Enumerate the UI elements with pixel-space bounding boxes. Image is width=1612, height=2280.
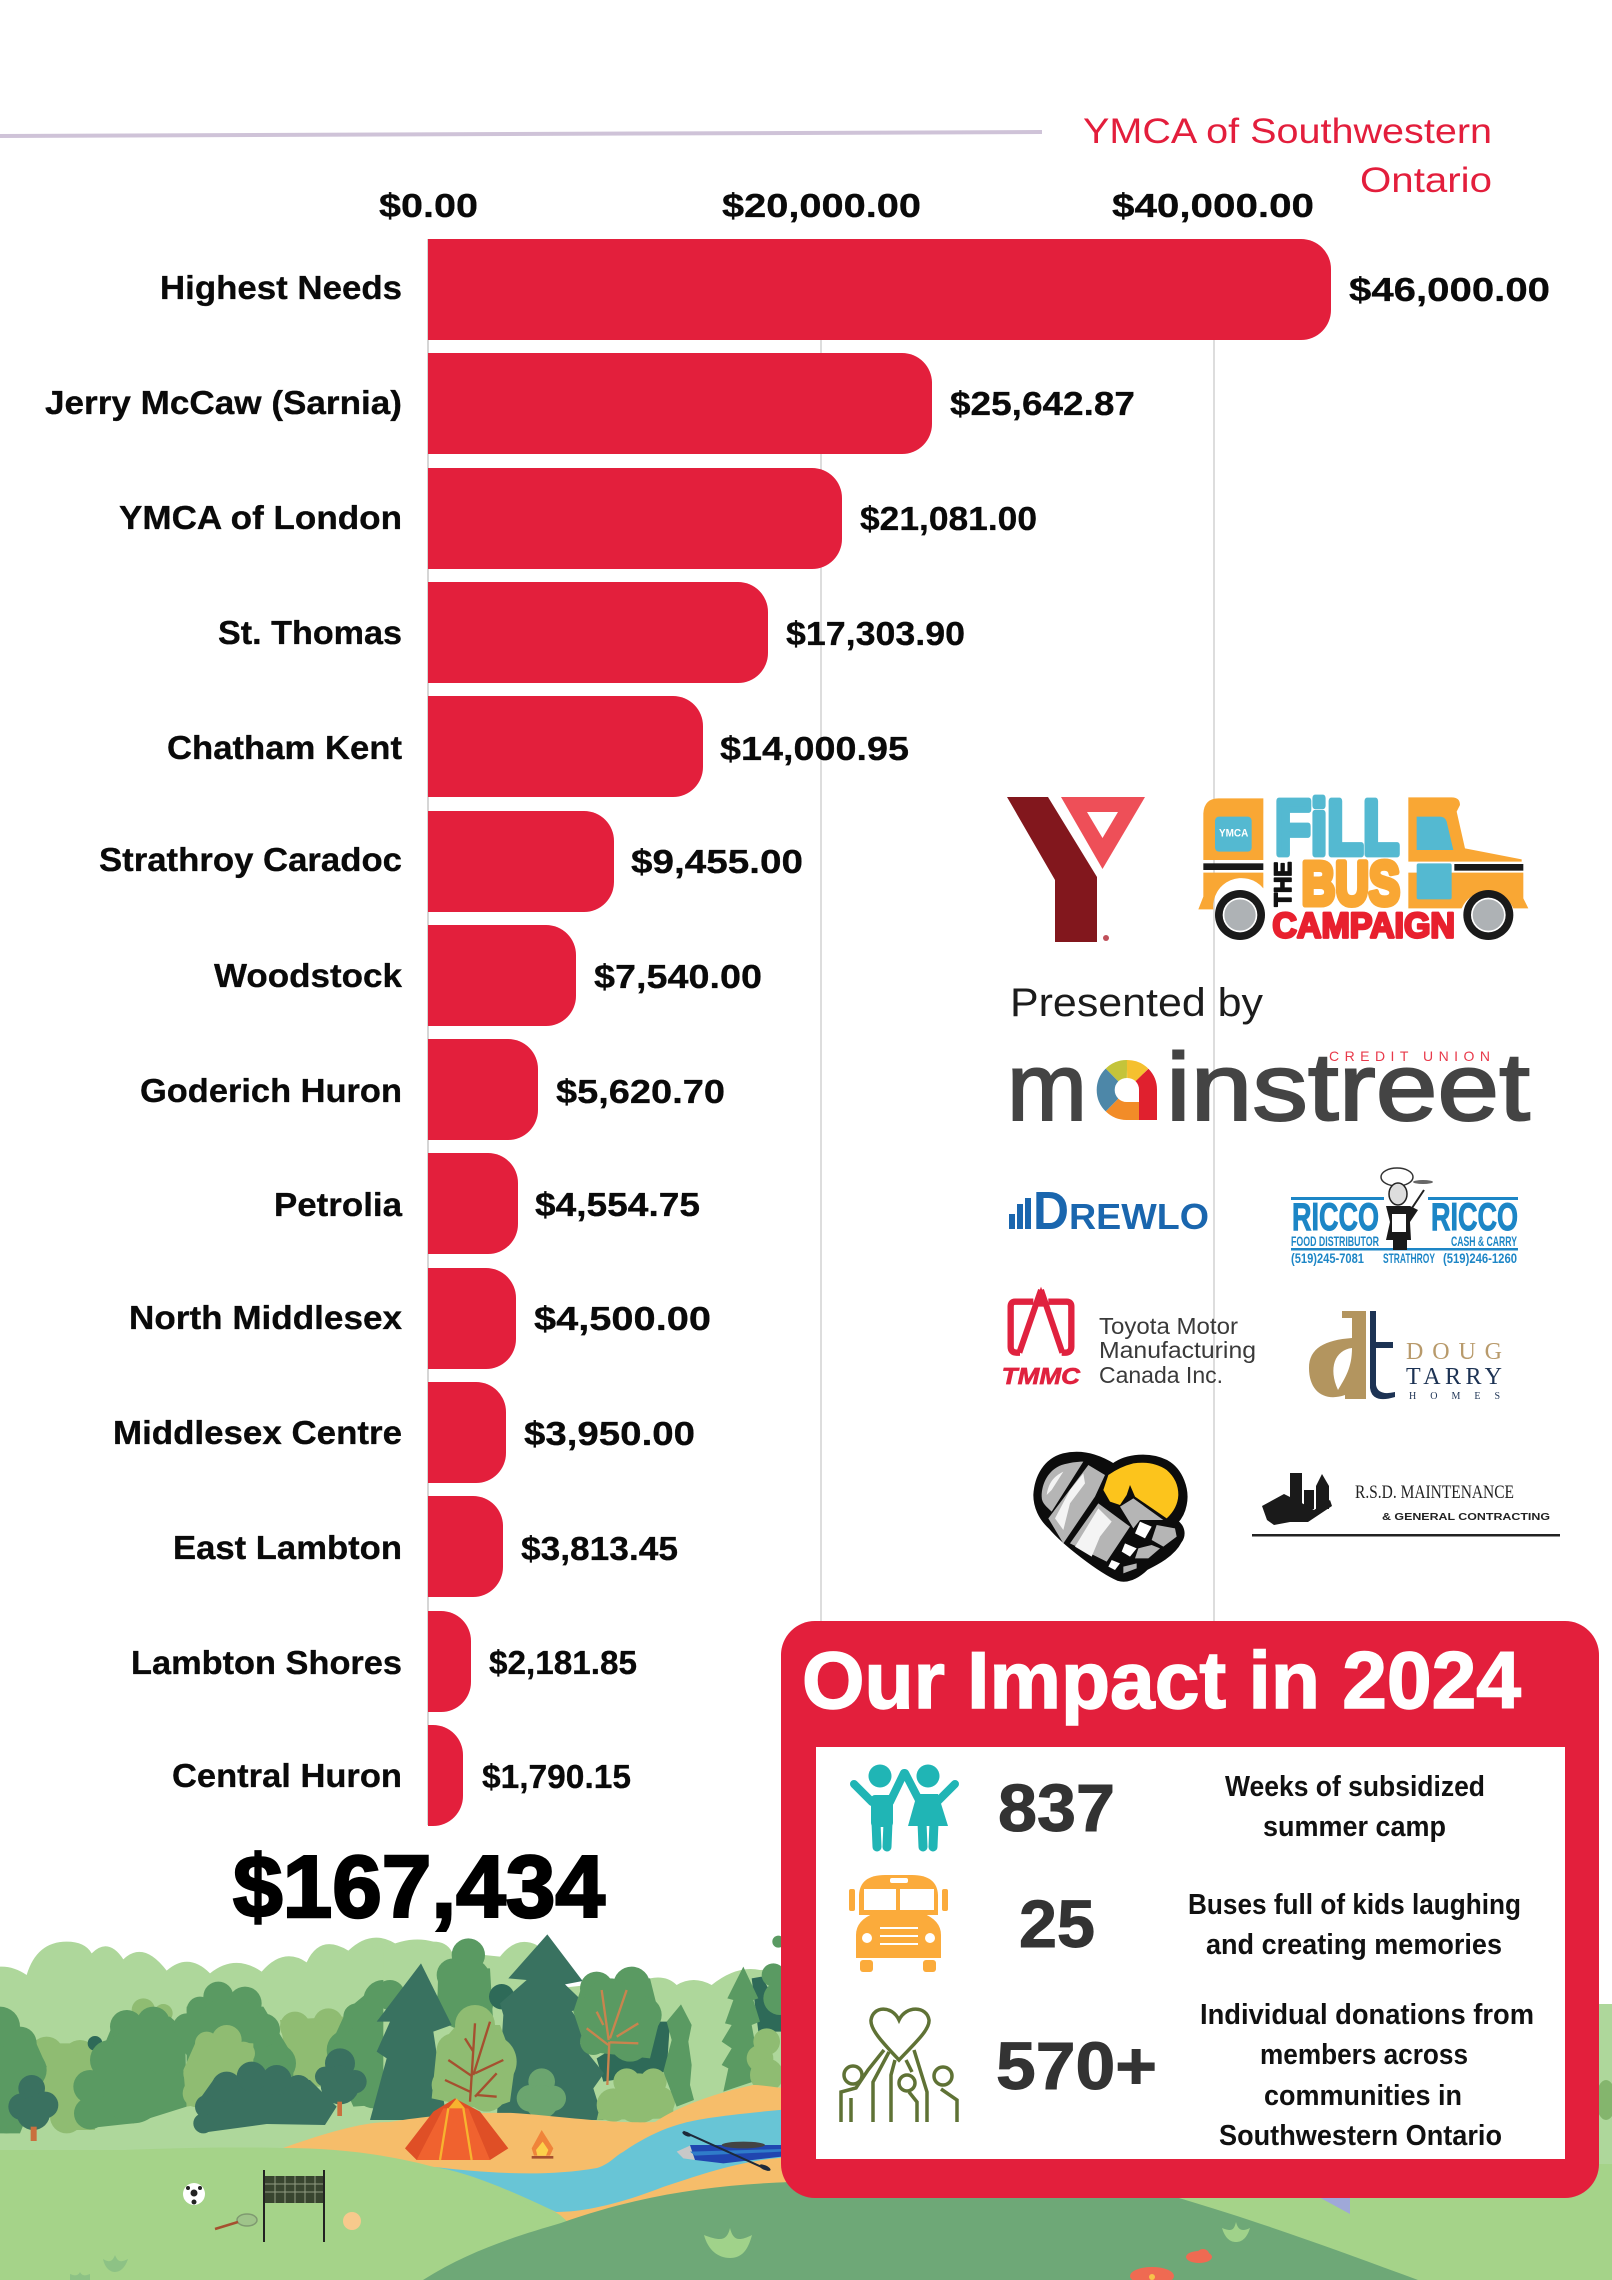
value labels: $5,620.70 [556,1073,725,1110]
sand bank [283,2085,790,2230]
text: buses full of kids: and creating memories [1206,1929,1502,1961]
icon: TMMC mark [1002,1287,1081,1389]
logo: Doug Tarry Homes: DOUG [1406,1339,1502,1365]
category labels: St. Thomas [218,614,402,651]
logo: R.S.D. Maintenance: & GENERAL CONTRACTING [1382,1512,1550,1523]
logo: R.S.D. Maintenance: R.S.D. MAINTENANCE [1355,1482,1514,1503]
logo: Ricco [1291,1168,1518,1266]
text: individual donations: Southwestern Ontario [1219,2120,1502,2152]
value labels: $7,540.00 [594,958,762,995]
category labels: East Lambton [173,1529,402,1566]
logo: Fill the Bus Campaign: CAMPAIGN [1272,906,1455,945]
river [434,2109,790,2212]
bar chart: donations by community [45,187,1550,1826]
camp items [405,2098,782,2172]
category labels: Middlesex Centre [113,1414,402,1451]
icon: racket [215,2214,257,2229]
logo: Mainstreet Credit Union: m [1007,1034,1087,1141]
category labels: Central Huron [172,1757,402,1794]
value labels [482,271,1550,1795]
text: individual donations [1200,1999,1534,2152]
logo: Fill the Bus Campaign: BUS [1302,850,1400,919]
axis labels: $40,000.00 [1112,187,1314,224]
stat: 25: 25 [1019,1887,1095,1962]
heading: YMCA of Southwestern Ontario [1083,112,1492,200]
logo: Mainstreet Credit Union [1007,1034,1530,1141]
axis labels: $20,000.00 [722,187,921,224]
icon: sports net [263,2170,325,2242]
icon: building [1009,1198,1031,1229]
left forest [0,1938,403,2163]
icon: soccer ball [183,2183,205,2205]
category labels [45,269,403,1794]
logo: Drewlo [1009,1181,1209,1241]
category labels: YMCA of London [119,499,402,536]
logo: Ricco: RICCO [1292,1196,1379,1239]
value labels: $46,000.00 [1349,271,1550,308]
category labels: North Middlesex [129,1299,403,1336]
value labels: $3,950.00 [524,1415,695,1452]
value labels: $4,500.00 [534,1300,711,1337]
icon: tent [405,2098,508,2160]
logo: Fill the Bus Campaign: THE [1270,862,1297,907]
text: weeks of subsidized summer camp [1225,1771,1485,1843]
axis labels: $0.00 [379,187,478,224]
right forest [370,1934,797,2132]
text: individual donations: members across [1260,2039,1468,2071]
logo: Fill the Bus Campaign [1198,786,1528,945]
logo: R.S.D. Maintenance [1252,1473,1560,1536]
value labels: $1,790.15 [482,1758,631,1795]
icon: coloured a [1106,1069,1148,1120]
text: buses full of kids [1188,1889,1521,1961]
panel: Our Impact in 2024 [781,1621,1599,2198]
logo: Toyota Motor Manufacturing Canada: Toyota Motor [1099,1313,1238,1339]
total amount: $167,434 [233,1837,605,1936]
logo: Mainstreet Credit Union: CREDIT UNION [1329,1048,1490,1064]
value labels: $21,081.00 [860,500,1037,537]
icon: kayak and paddle [677,2130,782,2172]
logo: Doug Tarry Homes: TARRY [1406,1364,1502,1390]
value labels: $3,813.45 [521,1530,678,1567]
text: weeks of subsidized summer camp: Weeks of subsidized [1225,1771,1485,1803]
stat: 570+: 570+ [996,2029,1157,2104]
category labels: Woodstock [214,957,403,994]
icon: campfire [532,2130,553,2157]
value labels: $9,455.00 [631,843,803,880]
icon: children [854,1764,955,1847]
logo: Mainstreet Credit Union: instreet [1166,1034,1530,1141]
icon: hand with buildings [1262,1473,1332,1525]
text: individual donations: Individual donations from [1200,1999,1534,2031]
logo: Ricco: RICCO [1431,1196,1518,1239]
value labels: $17,303.90 [786,615,965,652]
icon: grass tufts [70,2222,1250,2280]
logo: Ricco: (519)245-7081 [1291,1250,1364,1266]
value labels: $2,181.85 [489,1644,637,1681]
logo: Doug Tarry Homes: HOMES [1409,1391,1500,1402]
icon: flowers [1130,2249,1212,2280]
category labels: Chatham Kent [167,729,402,766]
bars [428,239,1331,1826]
icon: chef [1381,1168,1433,1250]
heading: YMCA of Southwestern Ontario: Ontario [1360,161,1492,200]
text: Presented by: Presented by [1010,981,1263,1025]
stat: 837: 837 [998,1771,1115,1846]
logo: Drewlo: D [1033,1181,1069,1241]
logo: Ricco: FOOD DISTRIBUTOR [1291,1233,1379,1249]
logo: Ricco: CASH & CARRY [1451,1233,1517,1249]
panel heading: Our Impact in 2024 [802,1636,1521,1726]
logo: Toyota Motor Manufacturing Canada [1002,1287,1256,1389]
ground [0,2147,640,2280]
icon: volleyball [343,2212,361,2230]
value labels: $4,554.75 [535,1186,700,1223]
value labels: $25,642.87 [950,385,1135,422]
category labels: Goderich Huron [140,1072,402,1109]
logo: Drewlo: REWLO [1069,1196,1209,1237]
logo: Fill the Bus Campaign: FiLL [1275,786,1399,871]
landscape illustration [0,1934,1612,2280]
logo: YMCA [1007,797,1145,942]
text: weeks of subsidized summer camp: summer camp [1263,1811,1446,1843]
logo: Toyota Motor Manufacturing Canada: Canada Inc. [1099,1362,1223,1388]
logo: handshake heart [1035,1453,1186,1580]
icon: TMMC mark: TMMC [1002,1363,1081,1389]
logo: Fill the Bus Campaign: YMCA [1219,828,1249,840]
logo: Ricco: (519)246-1260 [1443,1250,1517,1266]
foreground hill [423,2182,1418,2280]
category labels: Petrolia [274,1186,403,1223]
icon: people raising a heart [841,2009,957,2122]
category labels: Strathroy Caradoc [99,841,402,878]
category labels: Highest Needs [160,269,402,306]
heading: YMCA of Southwestern Ontario: YMCA of Southwestern [1083,112,1492,151]
logo: Doug Tarry Homes [1309,1311,1502,1402]
axis labels [379,187,1314,224]
category labels: Lambton Shores [131,1644,402,1681]
value labels: $14,000.95 [720,730,909,767]
logo: Toyota Motor Manufacturing Canada: Manufacturing [1099,1337,1256,1363]
category labels: Jerry McCaw (Sarnia) [45,384,402,421]
text: buses full of kids: Buses full of kids laughing [1188,1889,1521,1921]
logo: Ricco: STRATHROY [1383,1250,1435,1266]
icon: school bus [849,1875,948,1972]
text: individual donations: communities in [1264,2080,1462,2112]
